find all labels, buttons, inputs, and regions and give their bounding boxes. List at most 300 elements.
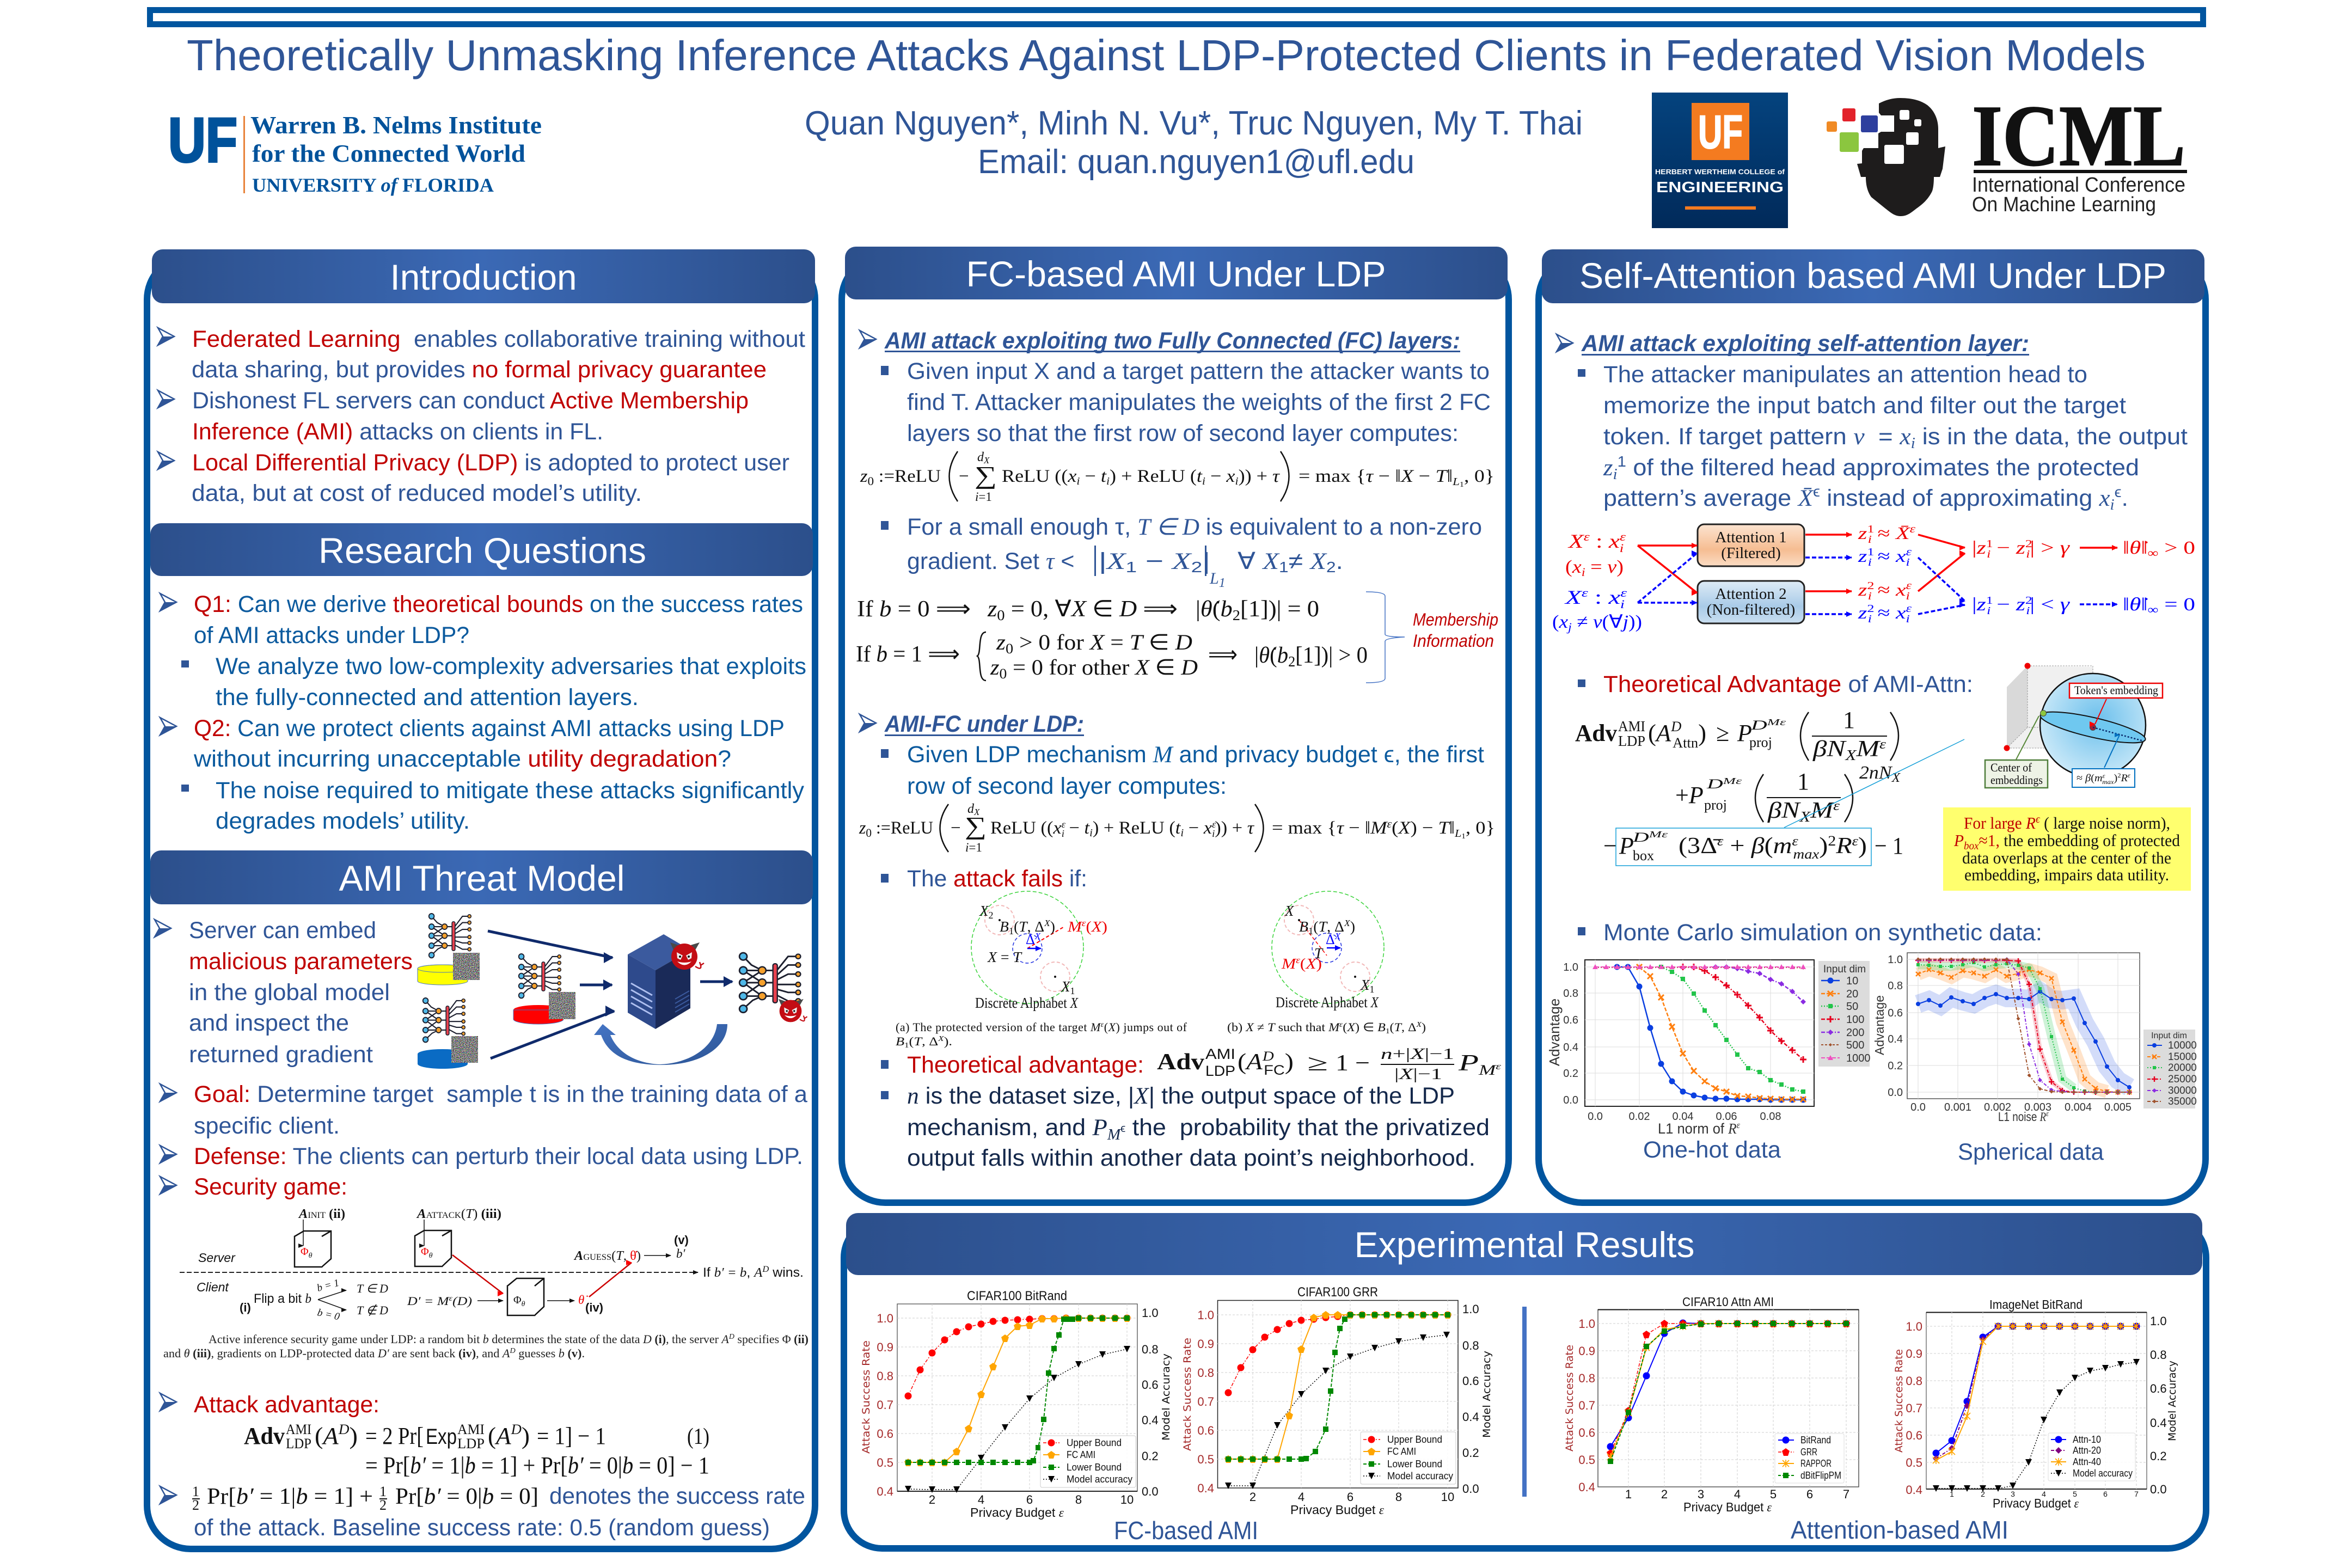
- diagram: attack fails case a: (: [1086, 918, 1092, 935]
- chart: CIFAR10 Attn AMI: 0.9: [1578, 1344, 1595, 1358]
- equation: attention advantage bound: P: [1737, 720, 1752, 746]
- chart: one-hot data: 0.02: [1629, 1111, 1650, 1123]
- diagram: attack fails case a: X: [1044, 918, 1050, 928]
- chart: ImageNet BitRand: Attack Success Rate: [1893, 1349, 1905, 1453]
- caption: attack fails figures: (a) The protected version of the target M: [896, 1020, 1100, 1034]
- diagram: security game: b = 1: [316, 1277, 340, 1294]
- chart: ImageNet BitRand: 2: [1981, 1490, 1985, 1498]
- equation: attention advantage bound: box: [1633, 848, 1654, 863]
- equation: attention advantage bound: M: [1810, 798, 1835, 823]
- caption: attack fails figures: 1: [1386, 1027, 1390, 1036]
- equation: membership cases: = 0 for other: [1007, 655, 1135, 679]
- diagram: security game: (D): [452, 1294, 472, 1308]
- equation: attention advantage bound: Attn: [1673, 735, 1698, 751]
- diagram: attention heads: (Filtered): [1721, 544, 1781, 562]
- equation: z0 ReLU: d: [977, 450, 984, 464]
- caption: attack fails figures: X) jumps out of: [1108, 1020, 1187, 1034]
- equation: z0 under LDP: −: [951, 818, 961, 838]
- chart: CIFAR100 BitRand: 0.2: [1142, 1449, 1159, 1463]
- legend: CIFAR10 Attn AMI: dBitFlipPM: [1800, 1470, 1841, 1481]
- diagram: security game: AATTACK(T) (iii): [416, 1207, 501, 1221]
- logo: UF Engineering: [1652, 93, 1788, 228]
- subheading: AMI-FC under LDP: AMI-FC under LDP:: [884, 711, 1084, 737]
- chart: CIFAR100 GRR: 4: [1298, 1490, 1304, 1504]
- chart: ImageNet BitRand: Model Accuracy: [2166, 1361, 2178, 1441]
- chart: ImageNet BitRand: 6: [2103, 1490, 2108, 1498]
- chart: spherical data: 0.005: [2104, 1101, 2132, 1113]
- diagram: attention heads: = 0: [2158, 595, 2195, 615]
- chart: CIFAR100 BitRand: 8: [1075, 1493, 1082, 1506]
- text block: attention attack description: of the filtered head approximates the protected: [1626, 455, 2139, 481]
- equation: z0 ReLU: X: [983, 455, 990, 465]
- chart: spherical data: 0.8: [1888, 980, 1903, 992]
- diagram: security game: T ∈ D: [357, 1282, 388, 1295]
- text block: introduction bullets: data sharing, but provides no formal privacy guarantee: [192, 357, 767, 383]
- panel: Experimental Results: [844, 1213, 2206, 1548]
- text block: small tau: 2: [1326, 559, 1336, 575]
- diagram: attack fails case a: M: [1067, 918, 1083, 935]
- text block: introduction bullets: Inference (AMI) attacks on clients in FL.: [192, 419, 603, 445]
- diagram: attack fails case a: Discrete Alphabet X: [975, 995, 1079, 1011]
- equation: attention advantage bound: βN: [1812, 737, 1847, 762]
- equation: membership cases: 0: [1000, 666, 1007, 682]
- text block: small tau: 1: [1279, 559, 1289, 575]
- text block: LDP mechanism: row of second layer computes:: [907, 773, 1227, 799]
- equation: attention advantage bound: D: [1633, 830, 1643, 845]
- caption: security game: D: [728, 1333, 734, 1341]
- panel: left column: [147, 249, 815, 1549]
- text block: research questions: Q2: Can we protect clients against AMI attacks using LDP: [194, 715, 785, 742]
- text block: theoretical advantage FC: P: [1458, 1051, 1479, 1076]
- legend: CIFAR10 Attn AMI: GRR: [1800, 1447, 1817, 1457]
- caption: security game: D: [509, 1347, 516, 1355]
- chart: CIFAR100 BitRand: 0.7: [877, 1398, 893, 1412]
- chart: CIFAR100 BitRand: 2: [929, 1493, 935, 1506]
- chart: one-hot data: 0.08: [1760, 1111, 1781, 1123]
- text block: introduction bullets: Dishonest FL servers can conduct Active Membership: [192, 388, 749, 414]
- legend: ImageNet BitRand: Attn-40: [2073, 1456, 2101, 1467]
- legend: input dim one-hot: Input dim: [1823, 964, 1866, 975]
- chart: CIFAR100 GRR: Attack Success Rate: [1181, 1338, 1193, 1451]
- caption: security game: and θ (iii), gradients on LDP-protected data D′ are sent back (iv), and A: [163, 1346, 510, 1360]
- chart: CIFAR100 GRR: 0.8: [1462, 1339, 1479, 1352]
- diagram: attention heads: z: [1858, 603, 1867, 622]
- legend: input dim spherical: 20000: [2168, 1062, 2197, 1074]
- text block: notation: mechanism, and P: [907, 1114, 1107, 1141]
- text block: small tau: τ <: [1046, 548, 1074, 574]
- diagram: attention heads: i: [1868, 534, 1872, 546]
- equation: attention advantage bound: AMI: [1618, 718, 1645, 734]
- legend: input dim spherical: 30000: [2168, 1085, 2197, 1097]
- equation: membership cases: ⟹: [1208, 642, 1238, 667]
- text block: notation: M: [1107, 1126, 1122, 1143]
- equation: z0 under LDP: i: [1212, 828, 1215, 839]
- diagram: attention heads: X̄: [1894, 523, 1911, 543]
- text block: research questions: without incurring unacceptable utility degradation ?: [193, 746, 731, 772]
- legend: CIFAR100 GRR: FC AMI: [1387, 1446, 1416, 1457]
- legend: CIFAR100 BitRand: FC AMI: [1067, 1449, 1095, 1460]
- chart: spherical data: 0.2: [1888, 1060, 1903, 1072]
- chart: CIFAR10 Attn AMI: 1: [1625, 1487, 1632, 1501]
- legend: input dim one-hot: 500: [1846, 1039, 1864, 1051]
- diagram: attention heads: 1: [1986, 538, 1993, 550]
- heading: FC-based AMI Under LDP: [845, 247, 1508, 299]
- diagram: attack fails case b: Δ: [1326, 932, 1335, 947]
- diagram: attention heads: (Non-filtered): [1707, 601, 1795, 618]
- text block: small tau: gradient. Set: [907, 548, 1039, 574]
- diagram: federated clients and malicious server: [418, 914, 807, 1069]
- equation: z0 under LDP: = max { τ − ‖M: [1272, 818, 1386, 838]
- legend: input dim spherical: 10000: [2168, 1040, 2197, 1051]
- text block: attention attack description: ϵ: [1813, 483, 1820, 500]
- diagram: attention heads: i: [1868, 556, 1872, 568]
- legend: input dim one-hot: 1000: [1846, 1052, 1871, 1064]
- equation: z0 under LDP: ε: [1212, 819, 1216, 830]
- chart: ImageNet BitRand: ImageNet BitRand: [1989, 1297, 2082, 1312]
- text block: server capabilities: and inspect the: [189, 1010, 349, 1036]
- diagram: attention heads: 2: [1867, 603, 1874, 615]
- caption: attack fails figures: ).: [944, 1034, 952, 1048]
- caption: attack fails figures: B: [896, 1034, 904, 1048]
- diagram: attack fails case b: ε: [1296, 955, 1300, 965]
- caption: security game: guesses: [516, 1346, 559, 1360]
- text block: attack advantage: Attack advantage:: [194, 1392, 379, 1418]
- equation: z0 under LDP: )) +: [1215, 818, 1247, 838]
- text block: small tau: |X: [1099, 548, 1121, 574]
- diagram: embedding sphere: ε: [2128, 771, 2130, 779]
- equation: z0 under LDP: i: [1089, 827, 1093, 839]
- diagram: security game: Φ: [301, 1246, 309, 1258]
- legend: ImageNet BitRand: [2048, 1433, 2135, 1481]
- label: Attention-based AMI: Attention-based AMI: [1791, 1516, 2008, 1544]
- equation: z0 ReLU: )) +: [1239, 467, 1272, 486]
- text block: success rate definition: Pr[b′ = 1|b = 1] +: [207, 1484, 373, 1509]
- chart: CIFAR10 Attn AMI: 5: [1770, 1487, 1777, 1501]
- chart: CIFAR100 BitRand: 0.6: [1142, 1378, 1159, 1392]
- diagram: attack fails case b: Discrete Alphabet X: [1276, 994, 1379, 1010]
- text block: research questions: We analyze two low-complexity adversaries that exploits: [216, 653, 806, 679]
- text block: small tau: −: [1137, 548, 1172, 574]
- caption: attack fails figures: (: [1343, 1020, 1347, 1034]
- text block: goal, defense, security game: Security game:: [194, 1174, 347, 1200]
- chart: CIFAR100 BitRand: 0.5: [877, 1456, 893, 1469]
- equation: z0 ReLU: i: [1076, 475, 1080, 487]
- equation: attack advantage: [244, 1422, 709, 1479]
- text block: success rate definition: 1: [379, 1484, 387, 1499]
- callout: membership information: Membership: [1413, 610, 1498, 629]
- diagram: attention heads: :: [1590, 530, 1609, 552]
- diagram: attack fails case b: 1: [1370, 984, 1374, 995]
- equation: z0 ReLU: i=1: [975, 490, 992, 504]
- text block: small tau: ≠: [1289, 548, 1310, 574]
- text block: FC attack description: find T. Attacker manipulates the weights of the first 2 FC: [907, 389, 1491, 415]
- equation: membership cases: X = T ∈ D: [1090, 630, 1191, 654]
- text block: theoretical advantage FC: ≥: [1307, 1051, 1328, 1076]
- chart: spherical data: L1 noise R: [1998, 1110, 2048, 1124]
- text block: theoretical advantage FC: |X |−1: [1394, 1065, 1442, 1083]
- equation: attention advantage bound: ε: [1717, 834, 1724, 849]
- chart: CIFAR10 Attn AMI: 1.0: [1578, 1317, 1595, 1331]
- diagram: attention heads: i: [1906, 613, 1910, 625]
- logo: ICML: ICML: [1972, 87, 2185, 184]
- chart: CIFAR10 Attn AMI: 6: [1806, 1487, 1813, 1501]
- legend: CIFAR10 Attn AMI: BitRand: [1800, 1435, 1831, 1445]
- chart: ImageNet BitRand: [1893, 1297, 2178, 1510]
- diagram: embedding sphere: R: [2121, 773, 2128, 784]
- diagram: attention heads: =: [1585, 557, 1607, 577]
- legend: input dim spherical: 15000: [2168, 1051, 2197, 1063]
- text block: attention attack description: memorize the input batch and filter out the target: [1603, 393, 2126, 419]
- diagram: attention heads: x: [1895, 603, 1906, 622]
- diagram: attention heads: 1: [1867, 523, 1874, 535]
- text block: success rate definition: [160, 1483, 805, 1541]
- caption: attack fails figures: [896, 1020, 1426, 1050]
- text block: theoretical advantage FC: (A: [1238, 1050, 1260, 1075]
- text block: small tau: 2: [1191, 559, 1202, 575]
- equation: z0 under LDP: L: [1454, 828, 1461, 840]
- legend: CIFAR100 GRR: Lower Bound: [1387, 1459, 1442, 1469]
- logo: UF Warren B. Nelms Institute: UNIVERSITY of FLORIDA: [252, 174, 494, 196]
- diagram: security game: Φ: [421, 1246, 429, 1258]
- diagram: attention heads: (x: [1565, 557, 1581, 577]
- equation: z0 under LDP: i: [1180, 827, 1184, 839]
- chart: CIFAR10 Attn AMI: 3: [1698, 1487, 1704, 1501]
- chart: CIFAR100 BitRand: 0.4: [1142, 1413, 1159, 1427]
- callout: large noise norm: data overlaps at the center of the: [1962, 848, 2171, 867]
- diagram: attention heads: i: [1620, 541, 1624, 555]
- text block: small tau: X: [1171, 549, 1192, 574]
- chart: one-hot data: 0.4: [1563, 1042, 1578, 1054]
- equation: attention advantage bound: X: [1845, 747, 1857, 763]
- chart: CIFAR100 BitRand: 6: [1026, 1493, 1033, 1506]
- text block: theoretical advantage FC: Adv: [1157, 1050, 1204, 1075]
- equation: z0 under LDP: ReLU ((x: [990, 818, 1061, 838]
- text block: server capabilities: malicious parameters: [189, 948, 413, 975]
- caption: security game: specifies Φ: [734, 1332, 794, 1346]
- text block: FC attack description: [881, 358, 1491, 446]
- diagram: attention heads: ε: [1906, 580, 1912, 592]
- chart: CIFAR10 Attn AMI: 0.7: [1578, 1399, 1595, 1412]
- diagram: attention heads: |z: [1972, 595, 1984, 615]
- equation: attention advantage bound: 1: [1797, 768, 1809, 795]
- text block: theoretical advantage FC: [881, 1045, 1501, 1083]
- chart: CIFAR100 GRR: 8: [1395, 1490, 1402, 1504]
- equation: z0 under LDP: 0: [866, 826, 872, 840]
- equation: membership cases: X ∈ D ⟹: [1071, 597, 1175, 622]
- chart: CIFAR100 BitRand: 0.6: [877, 1427, 893, 1441]
- divider: [1522, 1307, 1527, 1497]
- text block: small tau: .: [1336, 548, 1343, 574]
- chart: CIFAR10 Attn AMI: 0.8: [1578, 1371, 1595, 1385]
- legend: ImageNet BitRand: Attn-20: [2073, 1445, 2101, 1456]
- equation: attention advantage bound: X: [1799, 808, 1811, 825]
- legend: input dim one-hot: 10: [1846, 975, 1858, 987]
- diagram: attack fails case a: Δ: [1026, 932, 1035, 947]
- chart: spherical data: Advantage: [1872, 995, 1886, 1055]
- text block: FC attack description: layers so that the first row of second layer computes:: [907, 420, 1459, 446]
- equation: z0 ReLU: = max { τ − ‖X − T‖: [1298, 467, 1452, 486]
- chart: spherical data: 1.0: [1888, 954, 1903, 966]
- diagram: attention heads: ∞: [2147, 546, 2158, 560]
- equation: membership cases: X ∈ D: [1135, 655, 1197, 679]
- equation: z0 under LDP: (: [1392, 818, 1398, 838]
- caption: security game: b (v).: [559, 1346, 585, 1360]
- chart: ImageNet BitRand: 3: [2011, 1490, 2015, 1498]
- legend: CIFAR100 BitRand: Model accuracy: [1067, 1474, 1132, 1485]
- diagram: embedding sphere: 2: [2117, 771, 2121, 779]
- equation: attack advantage: = 2 Pr[: [365, 1423, 424, 1449]
- chart: spherical data: 0.003: [2024, 1101, 2051, 1113]
- text block: research questions: The noise required to mitigate these attacks significantly: [216, 777, 805, 804]
- equation: attention advantage bound: 2nN: [1859, 763, 1890, 783]
- text block: small tau: 1: [1126, 559, 1137, 575]
- equation: z0 under LDP: [859, 802, 1495, 854]
- text block: attack fails: The attack fails if:: [907, 866, 1087, 892]
- label: one-hot data: One-hot data: [1643, 1137, 1781, 1163]
- equation: attention advantage bound: Mε: [1648, 829, 1668, 840]
- text block: notation: output falls within another data point’s neighborhood.: [907, 1145, 1475, 1171]
- equation: attack advantage: Exp: [426, 1425, 457, 1449]
- text block: attention attack description: i: [1613, 466, 1618, 483]
- chart: one-hot data: Advantage: [1546, 999, 1563, 1066]
- label: FC-based AMI: FC-based AMI: [1114, 1516, 1258, 1545]
- equation: attention advantage bound: LDP: [1618, 733, 1645, 749]
- chart: spherical data: 0.0: [1910, 1101, 1926, 1113]
- text block: LDP mechanism: [881, 742, 1484, 799]
- chart: CIFAR100 GRR: 1.0: [1462, 1302, 1479, 1316]
- diagram: attention heads: γ: [2060, 595, 2071, 615]
- legend: input dim spherical: 25000: [2168, 1074, 2197, 1085]
- equation: attention advantage bound: D: [1670, 719, 1682, 734]
- diagram: attention heads: v(∀j)): [1593, 612, 1641, 632]
- chart: ImageNet BitRand: 0.4: [2150, 1416, 2167, 1430]
- chart: CIFAR100 GRR: 1.0: [1197, 1308, 1214, 1322]
- callout: membership information: Information: [1413, 631, 1494, 651]
- chart: CIFAR100 GRR: 0.6: [1462, 1374, 1479, 1388]
- diagram: attack fails case a: T, Δ: [1019, 918, 1044, 935]
- text block: attention attack description: The attacker manipulates an attention head to: [1603, 362, 2087, 388]
- diagram: attack fails case a: B: [1000, 918, 1009, 935]
- equation: membership cases: > 0 for: [1013, 630, 1090, 654]
- legend: CIFAR10 Attn AMI: RAPPOR: [1800, 1458, 1832, 1469]
- equation: z0 ReLU: x: [1226, 467, 1235, 486]
- diagram: attention heads: | >: [2030, 538, 2060, 558]
- chart: CIFAR100 GRR: 0.4: [1197, 1481, 1214, 1495]
- text block: attention attack description: ϵ: [2115, 483, 2122, 500]
- diagram: attack fails case a: [971, 891, 1107, 1011]
- diagram: attention heads: i: [1987, 548, 1990, 560]
- text block: small tau: X: [1309, 549, 1327, 574]
- caption: security game: (ii): [794, 1332, 808, 1346]
- legend: input dim one-hot: 50: [1846, 1001, 1858, 1013]
- legend: ImageNet BitRand: Attn-10: [2073, 1434, 2101, 1445]
- diagram: attention heads: [1552, 523, 2195, 634]
- diagram: attention heads: x: [1895, 546, 1906, 566]
- heading: FC-based AMI Under LDP: FC-based AMI Under LDP: [966, 254, 1386, 294]
- caption: attack fails figures: (: [909, 1034, 914, 1048]
- equation: z0 ReLU: t: [1101, 467, 1107, 486]
- caption: attack fails figures: (b) X ≠ T such that M: [1227, 1020, 1338, 1034]
- chart: one-hot data: 0.06: [1716, 1111, 1737, 1123]
- diagram: attack fails case b: X: [1284, 903, 1295, 919]
- diagram: security game: T ∉ D: [357, 1303, 388, 1317]
- equation: attack advantage: = 1] − 1: [537, 1423, 606, 1449]
- legend: CIFAR100 GRR: [1361, 1432, 1456, 1484]
- diagram: attention heads: i: [1620, 597, 1625, 611]
- diagram: attention heads: ε: [1906, 546, 1912, 558]
- diagram: attention heads: ≈: [1872, 546, 1896, 566]
- diagram: attack fails case a: X: [1061, 978, 1071, 995]
- diagram: attention heads: x: [1895, 580, 1906, 599]
- text block: server capabilities: returned gradient: [189, 1042, 373, 1068]
- diagram: attention heads: ε: [1584, 530, 1590, 543]
- equation: z0 under LDP: ε: [1062, 819, 1066, 830]
- chart: CIFAR10 Attn AMI: CIFAR10 Attn AMI: [1682, 1295, 1774, 1309]
- text block: server capabilities: Server can embed: [189, 917, 376, 944]
- equation: membership cases: |θ̇(b: [1196, 597, 1232, 622]
- caption: attack fails figures: (: [1390, 1020, 1394, 1034]
- caption: attack fails figures: ): [1422, 1020, 1426, 1034]
- diagram: security game: b = 0: [316, 1307, 341, 1323]
- chart: ImageNet BitRand: 0.4: [1906, 1483, 1922, 1497]
- chart: CIFAR100 BitRand: [860, 1289, 1172, 1520]
- equation: membership cases: If b = 0 ⟹: [857, 597, 971, 622]
- diagram: attention heads: ε: [1906, 603, 1912, 615]
- diagram: attack fails case b: B: [1299, 918, 1308, 935]
- diagram: embedding sphere: Token's embedding: [2074, 683, 2158, 697]
- legend: CIFAR100 GRR: Upper Bound: [1387, 1434, 1442, 1445]
- text block: theoretical advantage FC: LDP: [1205, 1063, 1235, 1079]
- equation: z0 ReLU: [860, 450, 1494, 504]
- chart: ImageNet BitRand: 1.0: [2150, 1314, 2167, 1328]
- caption: security game: Active inference security game under LDP: a random bit b determines the state of the data D (i), the server A: [209, 1332, 729, 1346]
- equation: attention advantage bound: ε: [1879, 737, 1886, 752]
- text block: attention attack description: i: [2110, 497, 2115, 513]
- chart: ImageNet BitRand: 0.7: [1906, 1401, 1922, 1415]
- equation: attention advantage bound: X: [1891, 771, 1901, 785]
- equation: attention advantage bound: M: [1855, 737, 1881, 762]
- equation: attention advantage bound: D: [1707, 777, 1717, 792]
- equation: attention advantage bound: ): [1819, 834, 1828, 859]
- equation: attention advantage bound: (A: [1648, 720, 1671, 746]
- equation: membership cases: = 0, ∀: [1005, 597, 1071, 622]
- diagram: attention heads: z: [1858, 523, 1867, 543]
- subheading: self-attention layer: AMI attack exploiting self-attention layer:: [1581, 330, 2029, 357]
- chart: CIFAR100 BitRand: 1.0: [1142, 1306, 1159, 1320]
- diagram: attention heads: ‖θ̇‖: [2123, 538, 2146, 558]
- callout: large noise norm: the embedding of protected: [2004, 831, 2189, 850]
- diagram: security game: [180, 1207, 804, 1323]
- legend: input dim spherical: 35000: [2168, 1096, 2197, 1107]
- chart: CIFAR100 BitRand: Privacy Budget ε: [970, 1505, 1064, 1520]
- diagram: attention heads: Attention 1: [1715, 529, 1787, 546]
- equation: attention advantage bound: 1: [1843, 707, 1855, 733]
- equation: z0 ReLU: L: [1452, 476, 1460, 488]
- diagram: attention heads: i: [1987, 605, 1990, 617]
- equation: z0 ReLU: ) + ReLU (: [1110, 467, 1197, 486]
- diagram: attack fails case b: T, Δ: [1319, 918, 1344, 935]
- equation: attention advantage bound: 2: [1828, 833, 1836, 849]
- diagram: attack fails case a: ε: [1082, 918, 1086, 928]
- callout: large noise norm: ϵ: [2036, 813, 2041, 825]
- legend: input dim one-hot: 100: [1846, 1014, 1864, 1026]
- legend: input dim spherical: Input dim: [2151, 1031, 2187, 1040]
- heading: Experimental Results: [846, 1213, 2202, 1275]
- chart: one-hot data: 0.8: [1563, 988, 1578, 1000]
- equation: attack advantage: ): [350, 1423, 358, 1449]
- diagram: security game: (v): [674, 1233, 689, 1247]
- text block: research questions: [160, 591, 806, 834]
